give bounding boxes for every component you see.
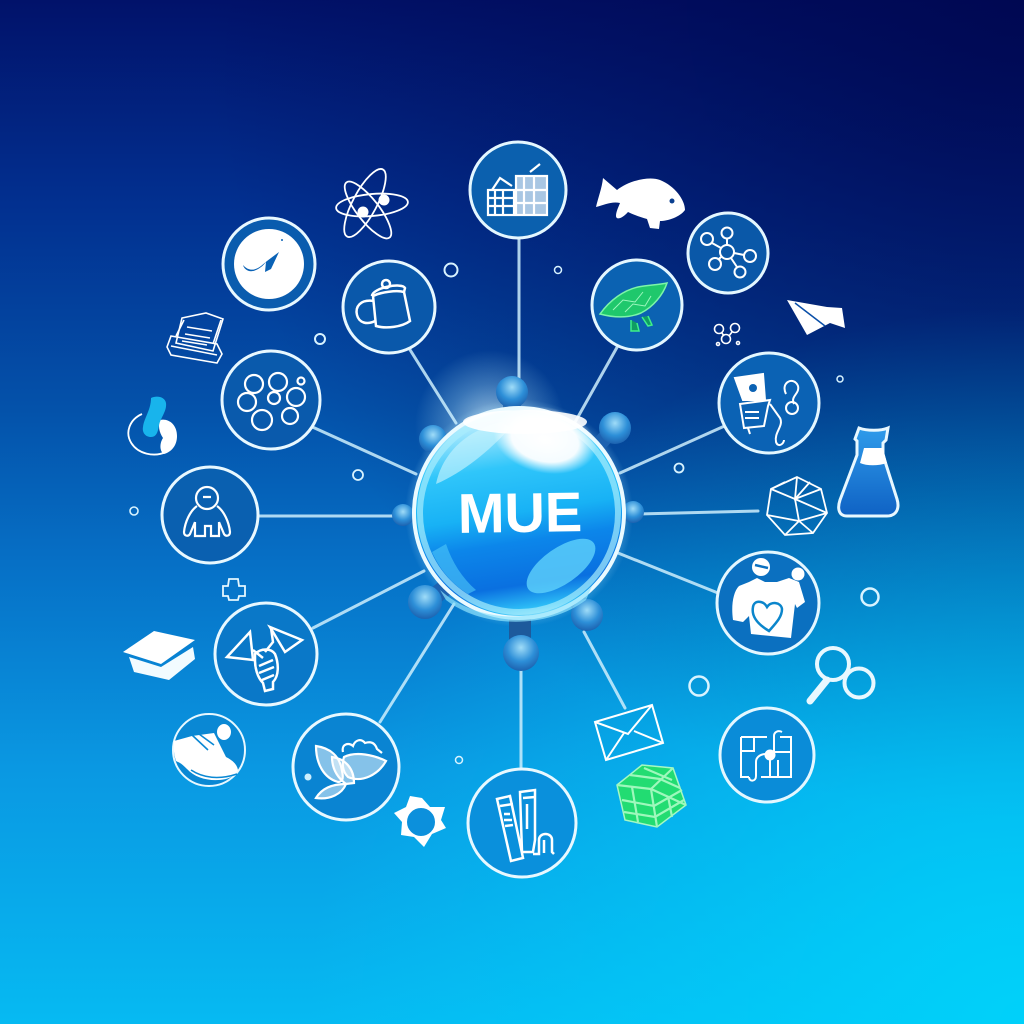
connector lines bbox=[258, 238, 758, 767]
icon: stamp bbox=[128, 397, 177, 455]
node: lab equipment bbox=[719, 353, 819, 453]
icon: paper plane bbox=[787, 300, 845, 335]
icon: polyhedron bbox=[767, 477, 827, 535]
node: hexagon cluster bbox=[222, 351, 320, 449]
sphere label: MUE bbox=[457, 480, 583, 545]
node: tubes bbox=[468, 769, 576, 877]
node: people and shirt bbox=[717, 552, 819, 654]
icon: envelope bbox=[595, 705, 663, 760]
node: person bbox=[162, 467, 258, 563]
icon: green cube bbox=[617, 765, 686, 827]
node: leaves bbox=[293, 714, 399, 820]
node: pipes map bbox=[720, 708, 814, 802]
icon: box bbox=[123, 631, 195, 680]
icon: shoe bbox=[173, 714, 245, 786]
icon: small cross bbox=[223, 579, 245, 600]
node: turtle leaf bbox=[592, 260, 682, 350]
connector beads bbox=[392, 376, 644, 671]
icon: magnifying glass bbox=[810, 648, 874, 701]
icon: atom bbox=[335, 164, 409, 244]
icon: small molecule bbox=[714, 324, 740, 346]
node: buildings bbox=[470, 142, 566, 238]
icon: flask bbox=[839, 428, 898, 516]
node: DNA triangles bbox=[215, 603, 317, 705]
node: white disc with check bbox=[223, 218, 315, 310]
icon: fish bbox=[596, 178, 685, 229]
icon: small ring molecule bbox=[394, 796, 446, 847]
icon: document stack bbox=[167, 313, 223, 363]
node: molecule bbox=[688, 213, 768, 293]
small bubbles bbox=[130, 264, 878, 764]
node: mug bbox=[343, 261, 435, 353]
central sphere bbox=[392, 350, 644, 671]
